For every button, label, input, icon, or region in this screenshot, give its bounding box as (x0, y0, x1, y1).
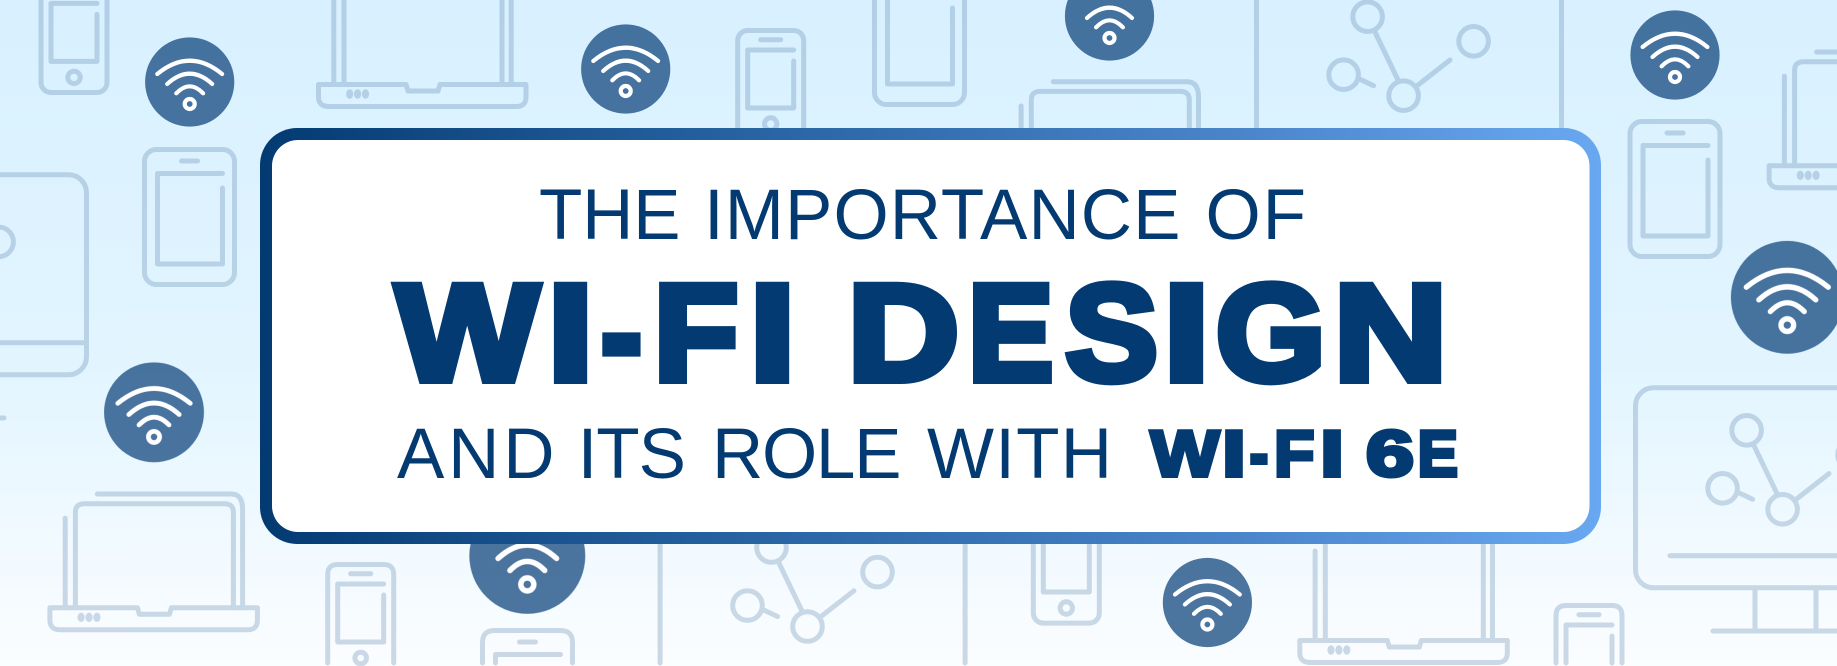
heading line 2: S (1066, 257, 1158, 410)
heading line 2: E (968, 257, 1053, 410)
white card (272, 140, 1590, 532)
heading line 3 emphasis: 6 (1366, 417, 1414, 490)
heading line 3: ITS (578, 415, 686, 494)
icon: tablet right (1630, 122, 1720, 256)
icon: phone top centre (738, 30, 804, 139)
heading line 3 emphasis: W (1151, 417, 1220, 490)
icon: laptop bottom left (50, 494, 257, 630)
heading line 2: W (396, 257, 539, 410)
icon: phone top left (41, 0, 107, 92)
icon: laptop bottom right (1300, 527, 1507, 662)
icon: tablet bottom (482, 630, 572, 663)
icon: wifi badge 4 (1630, 10, 1720, 100)
heading line 3 emphasis: - (1250, 417, 1268, 490)
icon: monitor top (1256, 0, 1562, 217)
heading line 2: - (601, 257, 642, 410)
icon: wifi badge 6 (104, 362, 204, 462)
heading line 1: THE (539, 176, 680, 255)
heading line 3: ROLE (712, 415, 902, 494)
heading line 2: N (1334, 257, 1447, 410)
icon: monitor right (1636, 388, 1837, 631)
icon: phone bottom left (328, 564, 394, 664)
heading line 2: F (654, 257, 738, 410)
icon: phone bottom right (1556, 606, 1622, 663)
icon: wifi badge 7 (469, 498, 585, 614)
heading line 3 emphasis: I (1320, 417, 1344, 490)
heading line 3 emphasis: E (1418, 417, 1458, 490)
icon: laptop top left (318, 0, 526, 106)
icon: wifi badge 3 (1065, 0, 1154, 61)
heading line 1: OF (1206, 176, 1306, 255)
heading line 2: G (1216, 257, 1326, 410)
icon: monitor bottom (660, 510, 965, 663)
icon: wifi badge 1 (145, 37, 234, 127)
heading line 3 emphasis: I (1222, 417, 1246, 490)
icon: tablet top centre (874, 0, 964, 104)
icon: phone bottom centre (1033, 514, 1099, 623)
heading line 3: WITH (927, 415, 1112, 494)
heading line 3: AND (397, 415, 554, 494)
heading line 3 emphasis: F (1274, 417, 1314, 490)
icon: wifi badge 5 (1731, 241, 1837, 354)
panel: title card (260, 128, 1601, 544)
heading line 2: D (848, 257, 959, 410)
heading line 2: I (548, 257, 593, 410)
heading line 2: I (750, 257, 795, 410)
heading line 1: IMPORTANCE (704, 176, 1180, 255)
icon: laptop top right (1769, 52, 1837, 188)
icon: wifi badge 2 (581, 24, 670, 114)
icon: wifi badge 8 (1163, 558, 1252, 647)
heading line 2: I (1164, 257, 1209, 410)
icon: monitor left (0, 175, 86, 418)
icon: laptop top centre (1006, 82, 1213, 218)
gradient frame (260, 128, 1601, 544)
icon: tablet left (144, 150, 234, 284)
